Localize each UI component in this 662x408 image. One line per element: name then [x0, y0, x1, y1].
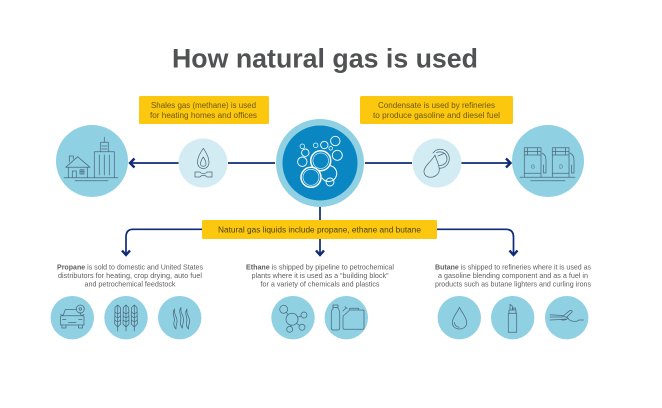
text: butane	[435, 262, 591, 288]
callout: condensate	[360, 96, 513, 124]
icon: car	[51, 296, 94, 339]
callout: natural gas liquids	[202, 220, 437, 239]
icon: liquid drop	[438, 296, 481, 339]
callout: condensate: to produce gasoline and diesel fuel	[373, 111, 500, 120]
text: propane: Propane is sold to domestic and United States	[57, 262, 203, 272]
arrows: natural gas liquids branches	[122, 205, 518, 255]
arrow: centre to fuel pumps	[365, 158, 510, 168]
text: propane: distributors for heating, crop drying, auto fuel	[58, 271, 202, 280]
callout: natural gas liquids: Natural gas liquids include propane, ethane and butane	[218, 226, 421, 234]
icon: molecule	[271, 296, 315, 339]
text: ethane: Ethane is shipped by pipeline to petrochemical	[246, 262, 394, 272]
icon: home and office buildings	[56, 125, 128, 197]
text: propane	[57, 262, 203, 288]
text: butane: a gasoline blending component and as a fuel in	[438, 271, 588, 280]
icon: condensate drop and gauge	[412, 138, 462, 188]
text: ethane	[246, 262, 394, 288]
icon: fuel pumps	[512, 125, 584, 197]
icon: fuel pumps: G	[531, 164, 535, 170]
callout: condensate: Condensate is used by refineries	[378, 101, 495, 110]
callout: shales gas: for heating homes and offices	[150, 111, 257, 120]
text: ethane: for a variety of chemicals and plastics	[260, 280, 380, 288]
text: propane: and petrochemical feedstock	[84, 280, 176, 288]
text: butane: Butane is shipped to refineries where it is used as	[435, 262, 591, 272]
text: ethane: plants where it is used as a “building block”	[252, 271, 389, 280]
callout: shales gas	[139, 96, 269, 124]
icon: butane lighter	[491, 296, 534, 339]
icon: plastic bottles	[325, 296, 368, 339]
icon: heat waves	[158, 296, 201, 339]
icon: gas flame	[178, 138, 228, 188]
text: butane: products such as butane lighters and curling irons	[435, 280, 591, 288]
icon: natural gas bubbles	[276, 119, 364, 207]
icon: fuel pumps: D	[559, 164, 563, 170]
title: How natural gas is used	[172, 44, 478, 74]
icon: wheat crops	[104, 296, 148, 339]
icon: curling iron	[545, 296, 588, 339]
callout: shales gas: Shales gas (methane) is used	[151, 101, 256, 110]
arrow: centre to buildings	[130, 158, 275, 168]
